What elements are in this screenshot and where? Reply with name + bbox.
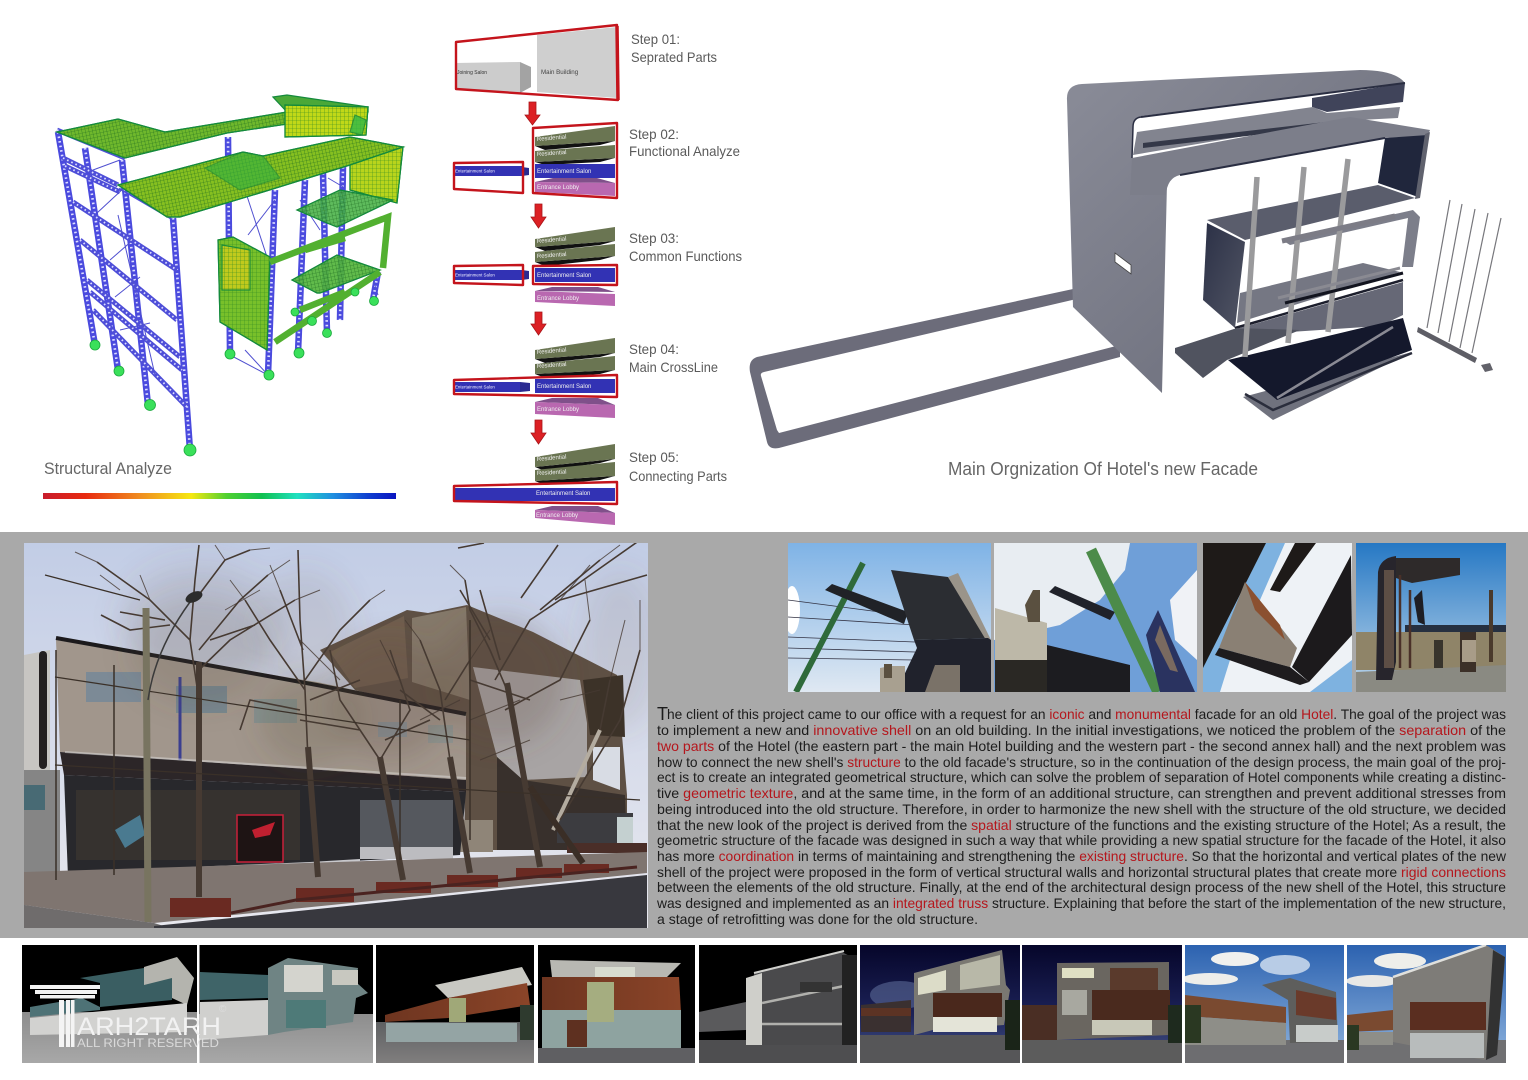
step 01 diagram: Joining Salon bbox=[457, 70, 487, 76]
long horizontal loop element bbox=[750, 280, 1120, 448]
step 01 diagram: Main Building bbox=[541, 69, 579, 76]
render 1 bbox=[22, 945, 197, 1063]
step 02 diagram: Entertainment Salon bbox=[455, 168, 495, 174]
photo 1: crane lifting panel bbox=[788, 543, 991, 692]
render 2 bbox=[200, 945, 373, 1063]
green base supports bbox=[90, 288, 378, 456]
step 02 diagram: Residential bbox=[537, 150, 567, 158]
step labels: Step 01: bbox=[631, 31, 680, 47]
description paragraph: shell of the project were proposed in the form of vertical structural walls and horizontal structural plates that create more rigid connections bbox=[657, 864, 1506, 880]
main shell wall and roof bbox=[1067, 70, 1405, 393]
render 3 bbox=[376, 945, 534, 1063]
description paragraph: was designed and implemented as an integrated truss structure. Explaining that before the start of the implementation of the new structure, bbox=[656, 895, 1506, 911]
step labels: Step 04: bbox=[629, 341, 679, 357]
render 5 bbox=[699, 945, 857, 1063]
render 9 bbox=[1347, 945, 1506, 1063]
description paragraph: to implement a new and innovative shell on an old building. In the initial investigations, we noticed the problem of the separation of the bbox=[657, 722, 1506, 738]
logo: ARH2TARH watermark: ALL RIGHT RESERVED bbox=[77, 1036, 219, 1050]
step 05 diagram: Residential bbox=[537, 454, 567, 463]
render 8 bbox=[1185, 945, 1344, 1063]
wall opening bbox=[1115, 253, 1131, 274]
description paragraph: that the new look of the project is derived from the spatial structure of the functions and the existing structure of the Hotel; As a result, the bbox=[657, 817, 1506, 833]
stress colour scale bar bbox=[43, 493, 396, 499]
step 03 diagram: Entrance Lobby bbox=[537, 296, 579, 302]
step 01 diagram bbox=[455, 25, 618, 100]
step 02 diagram bbox=[454, 123, 617, 198]
green shell plates with stress mesh bbox=[57, 95, 403, 350]
step 03 diagram: Entertainment Salon bbox=[537, 273, 591, 279]
step 04 diagram: Entertainment Salon bbox=[455, 384, 495, 390]
step 05 diagram: Entertainment Salon bbox=[536, 491, 590, 497]
photo 2: crane and beam on building bbox=[994, 543, 1197, 692]
step labels: Connecting Parts bbox=[629, 468, 727, 484]
description paragraph: between the elements of the old structure. Finally, at the end of the architectural design process of the new shell of the Hotel, this structure bbox=[657, 879, 1506, 895]
panel: step diagrams bbox=[454, 25, 742, 525]
structural frame: blue lattice columns and beams bbox=[57, 130, 378, 450]
render 7 bbox=[1022, 945, 1182, 1063]
step 03 diagram: Residential bbox=[537, 252, 567, 260]
step 02 diagram: Entrance Lobby bbox=[537, 185, 579, 191]
step labels: Step 05: bbox=[629, 449, 679, 465]
panel: renderings strip bbox=[22, 945, 1506, 1063]
arrow: step 1 to 2 bbox=[525, 102, 540, 125]
logo: ARH2TARH watermark: ARH2TARH bbox=[77, 1013, 221, 1041]
step 05 diagram: Residential bbox=[537, 469, 567, 477]
step 02 diagram: Residential bbox=[537, 134, 567, 143]
thin rods and small beam at right bbox=[1417, 200, 1501, 372]
description paragraph: tive geometric texture, and at the same time, in the form of an additional structure, can strengthen and prevent additional stresses from bbox=[657, 785, 1506, 801]
description paragraph: being introduced into the old structure. Therefore, in order to harmonize the new shell with the structure of the old structure, we decided bbox=[657, 801, 1506, 817]
logo: ARH2TARH watermark: © bbox=[219, 1004, 227, 1015]
step labels: Seprated Parts bbox=[631, 49, 717, 65]
panel: structural analysis model bbox=[43, 95, 403, 499]
step 04 diagram: Residential bbox=[537, 347, 567, 356]
step 05 diagram: Entrance Lobby bbox=[536, 513, 578, 519]
step 04 diagram: Entertainment Salon bbox=[537, 384, 591, 390]
step labels: Step 03: bbox=[629, 230, 679, 246]
step labels: Functional Analyze bbox=[629, 143, 740, 159]
front shell band, right side and roof edge bbox=[1130, 83, 1430, 199]
back shell band interior bbox=[1133, 83, 1405, 155]
panel: construction photos bbox=[784, 543, 1506, 692]
step 04 diagram: Residential bbox=[537, 362, 567, 370]
step 02 diagram: Entertainment Salon bbox=[537, 169, 591, 175]
description paragraph: a stage of retrofitting was done for the old structure. bbox=[657, 911, 978, 927]
caption: main organization: Main Orgnization Of Hotel's new Facade bbox=[948, 459, 1258, 479]
step 03 diagram: Residential bbox=[537, 236, 567, 245]
photo: existing hotel street view bbox=[24, 543, 648, 928]
vertical columns and horizontal bars bbox=[1245, 159, 1403, 357]
arrow: step 3 to 4 bbox=[531, 312, 546, 335]
step labels: Common Functions bbox=[629, 248, 742, 264]
step 04 diagram bbox=[454, 338, 617, 418]
description paragraph: he client of this project came to our office with a request for an iconic and monumental facade for an old Hotel. The goal of the project was bbox=[667, 706, 1506, 722]
logo: ARH2TARH watermark bbox=[30, 985, 227, 1050]
description paragraph: has more coordination in terms of maintaining and strengthening the existing structure. So that the horizontal and vertical plates of the new bbox=[657, 848, 1507, 864]
description paragraph: how to connect the new shell's structure to the old facade's structure, so in the continuation of the design process, the main goal of the proj- bbox=[657, 754, 1506, 770]
photo 3: steel plate against sky bbox=[1203, 543, 1352, 692]
description paragraph bbox=[656, 704, 1507, 927]
caption: structural analyze: Structural Analyze bbox=[44, 459, 172, 478]
render 6 bbox=[860, 945, 1020, 1063]
description paragraph: geometric structure of the facade was designed in such a way that while providing a new spatial structure for the facade of the Hotel, it also bbox=[657, 832, 1506, 848]
step 04 diagram: Entrance Lobby bbox=[537, 407, 579, 413]
step labels: Step 02: bbox=[629, 126, 679, 142]
panel: exploded facade model bbox=[750, 70, 1501, 479]
floor plates bbox=[1175, 318, 1412, 420]
grey background band bbox=[0, 532, 1528, 938]
step 03 diagram bbox=[454, 227, 617, 306]
step 03 diagram: Entertainment Salon bbox=[455, 272, 495, 278]
middle frame element bbox=[1203, 185, 1420, 332]
description paragraph: T bbox=[657, 704, 668, 724]
step labels: Main CrossLine bbox=[629, 359, 718, 375]
step labels bbox=[629, 31, 742, 484]
description paragraph: two parts of the Hotel (the eastern part - the main Hotel building and the western part - the second annex hall) and the next problem was bbox=[657, 738, 1506, 754]
photo 4: workers and shell on roof bbox=[1356, 543, 1506, 692]
render 4 bbox=[538, 945, 695, 1063]
step 05 diagram bbox=[454, 444, 617, 525]
description paragraph: ect is to create an integrated geometrical structure, which can solve the problem of separation of Hotel components while creating a distinc- bbox=[657, 769, 1506, 785]
arrow: step 4 to 5 bbox=[531, 420, 546, 444]
arrow: step 2 to 3 bbox=[531, 204, 546, 228]
